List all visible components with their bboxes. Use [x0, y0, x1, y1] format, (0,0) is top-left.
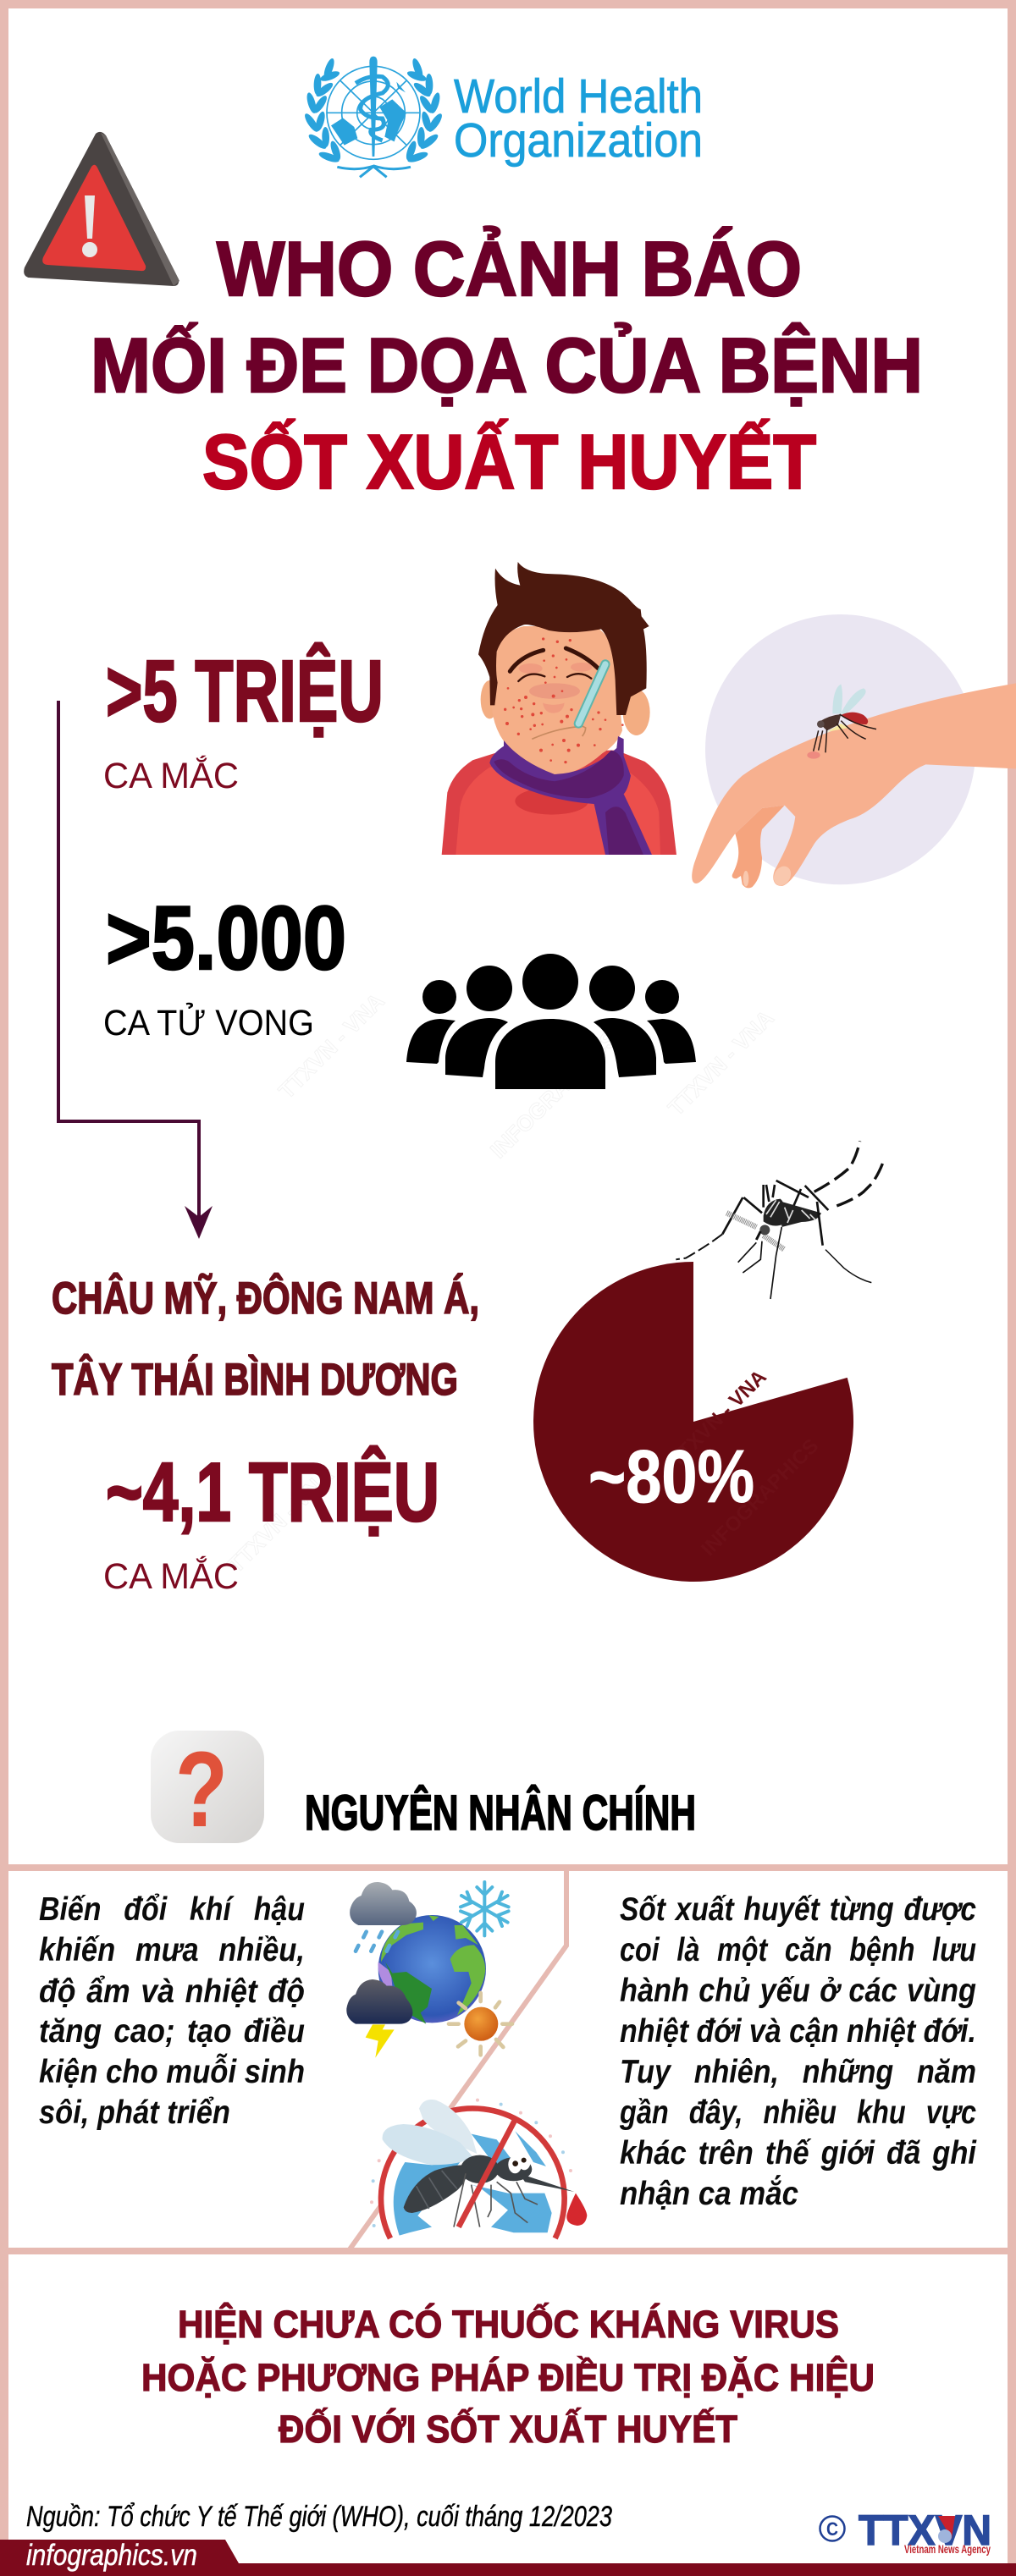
causes heading: NGUYÊN NHÂN CHÍNH	[305, 1786, 696, 1841]
text block: climate: độ ẩm và nhiệt độ	[39, 1973, 305, 2010]
mouth	[532, 726, 586, 739]
illustration: mosquito biting a hand	[692, 614, 1016, 889]
callout: no antiviral treatment: HOẶC PHƯƠNG PHÁP ĐIỀU TRỊ ĐẶC HIỆU	[141, 2356, 875, 2399]
connector arrow	[58, 701, 213, 1239]
stat: cases: >5 TRIỆU	[106, 642, 384, 740]
ribbon	[337, 166, 411, 177]
blood drop	[566, 2193, 587, 2226]
dashed back legs	[814, 1141, 860, 1192]
pie watermarks: TTXVN - VNA	[665, 1366, 771, 1472]
stat: regional cases: ~4,1 TRIỆU	[106, 1445, 439, 1538]
stat: deaths: CA TỬ VONG	[103, 1002, 314, 1043]
staff and snake	[369, 57, 378, 157]
callout: no antiviral treatment: HIỆN CHƯA CÓ THUỐC KHÁNG VIRUS	[178, 2303, 839, 2346]
stat: regional cases: CA MẮC	[103, 1555, 239, 1597]
illustration: large mosquito	[676, 1141, 885, 1299]
text block: climate: kiện cho muỗi sinh	[39, 2053, 305, 2090]
globe lines	[327, 66, 420, 159]
ears	[481, 680, 499, 718]
watermarks: INFOGRAPHICS	[485, 1026, 622, 1163]
regions heading	[52, 1272, 479, 1405]
stat: deaths: >5.000	[106, 887, 346, 988]
slash	[459, 2120, 515, 2227]
small mosquito	[832, 684, 866, 715]
footer bar	[0, 2539, 1016, 2576]
shirt	[442, 751, 676, 855]
hand	[692, 683, 1016, 886]
icon: question tile	[151, 1730, 264, 1849]
stat: deaths	[103, 887, 346, 1043]
footer bar: infographics.vn	[26, 2539, 197, 2572]
wordmark: TTXVN	[859, 2507, 991, 2554]
pie chart: 80 percent	[533, 1262, 853, 1582]
watermarks: TTXVN - VNA	[663, 1005, 779, 1120]
storm cloud	[346, 1979, 412, 2024]
stat: cases: CA MẮC	[103, 755, 239, 796]
brows and closed eyes	[510, 648, 599, 671]
stat: regional cases	[103, 1445, 439, 1597]
thermometer	[578, 664, 605, 724]
icon: climate globe	[346, 1882, 512, 2058]
title	[91, 226, 923, 505]
title: WHO CẢNH BÁO	[217, 226, 802, 312]
text block: spread: Tuy nhiên, những năm	[620, 2054, 976, 2090]
continents	[331, 82, 406, 146]
text block: climate	[39, 1891, 305, 2131]
icon: group of people	[406, 954, 696, 1089]
upper legs	[722, 1181, 828, 1234]
text block: spread: khác trên thế giới đã ghi	[620, 2135, 977, 2171]
text block: spread	[619, 1891, 977, 2212]
scarf	[489, 736, 652, 855]
callout: no antiviral treatment	[141, 2303, 875, 2451]
lower legs	[770, 1227, 781, 1299]
face	[491, 626, 622, 774]
TTXVN logo: C	[826, 2518, 838, 2540]
callout: no antiviral treatment: ĐỐI VỚI SỐT XUẤT HUYẾT	[279, 2408, 737, 2451]
pie watermarks	[665, 1366, 823, 1560]
snowflake	[461, 1882, 509, 1935]
prohibition ring	[381, 2108, 565, 2238]
watermarks: TTXVN - VNA	[273, 988, 389, 1104]
map	[394, 2131, 552, 2236]
rash	[504, 637, 624, 763]
text block: climate: Biến đổi khí hậu	[39, 1891, 305, 1928]
title: MỐI ĐE DỌA CỦA BỆNH	[91, 322, 923, 409]
legs	[454, 2173, 538, 2227]
copyright mark	[820, 2517, 845, 2540]
WHO logo: Organization	[454, 113, 703, 168]
text block: spread: hành chủ yếu ở các vùng	[620, 1973, 976, 2009]
pie label: ~80%	[588, 1434, 754, 1518]
wings	[419, 2100, 477, 2154]
watermarks: TTXVN - VNA	[223, 1461, 339, 1577]
background circle	[705, 614, 975, 884]
logo wordmark: World Health	[454, 69, 703, 124]
hair	[478, 562, 649, 715]
body	[764, 1199, 785, 1226]
lightning	[366, 2024, 395, 2058]
text block: climate: tăng cao; tạo điều	[39, 2013, 305, 2050]
TTXVN logo	[820, 2507, 991, 2556]
icon: no mosquito	[370, 2099, 587, 2238]
text block: climate: khiến mưa nhiều,	[39, 1932, 305, 1968]
regions heading: CHÂU MỸ, ĐÔNG NAM Á,	[52, 1272, 479, 1324]
sun	[449, 1993, 512, 2055]
stat: cases	[103, 642, 384, 796]
back fingers	[732, 806, 785, 888]
illustration: sick man	[442, 562, 676, 855]
rain	[356, 1932, 398, 1951]
body	[404, 2165, 467, 2213]
wreath right	[404, 58, 444, 164]
icon: question tile: ?	[175, 1730, 228, 1849]
logo emblem	[302, 57, 444, 177]
watermarks	[223, 988, 779, 1577]
wing hatch	[726, 1213, 785, 1250]
title: SỐT XUẤT HUYẾT	[202, 419, 816, 505]
pie watermarks: INFOGRAPHICS	[697, 1434, 823, 1560]
panel divider	[350, 1871, 566, 2249]
grey cloud	[350, 1882, 417, 1925]
globe	[378, 1915, 486, 2023]
source note: Nguồn: Tổ chức Y tế Thế giới (WHO), cuối tháng 12/2023	[26, 2501, 612, 2533]
text block: spread: nhận ca mắc	[620, 2175, 798, 2212]
WHO logo	[302, 57, 703, 177]
icon: warning triangle	[24, 132, 179, 286]
regions heading: TÂY THÁI BÌNH DƯƠNG	[52, 1353, 458, 1405]
ring background	[381, 2108, 565, 2238]
text block: climate: sôi, phát triển	[39, 2094, 230, 2131]
globe swoosh	[938, 2516, 955, 2539]
sparkles	[370, 2099, 572, 2204]
wreath left	[302, 58, 343, 164]
